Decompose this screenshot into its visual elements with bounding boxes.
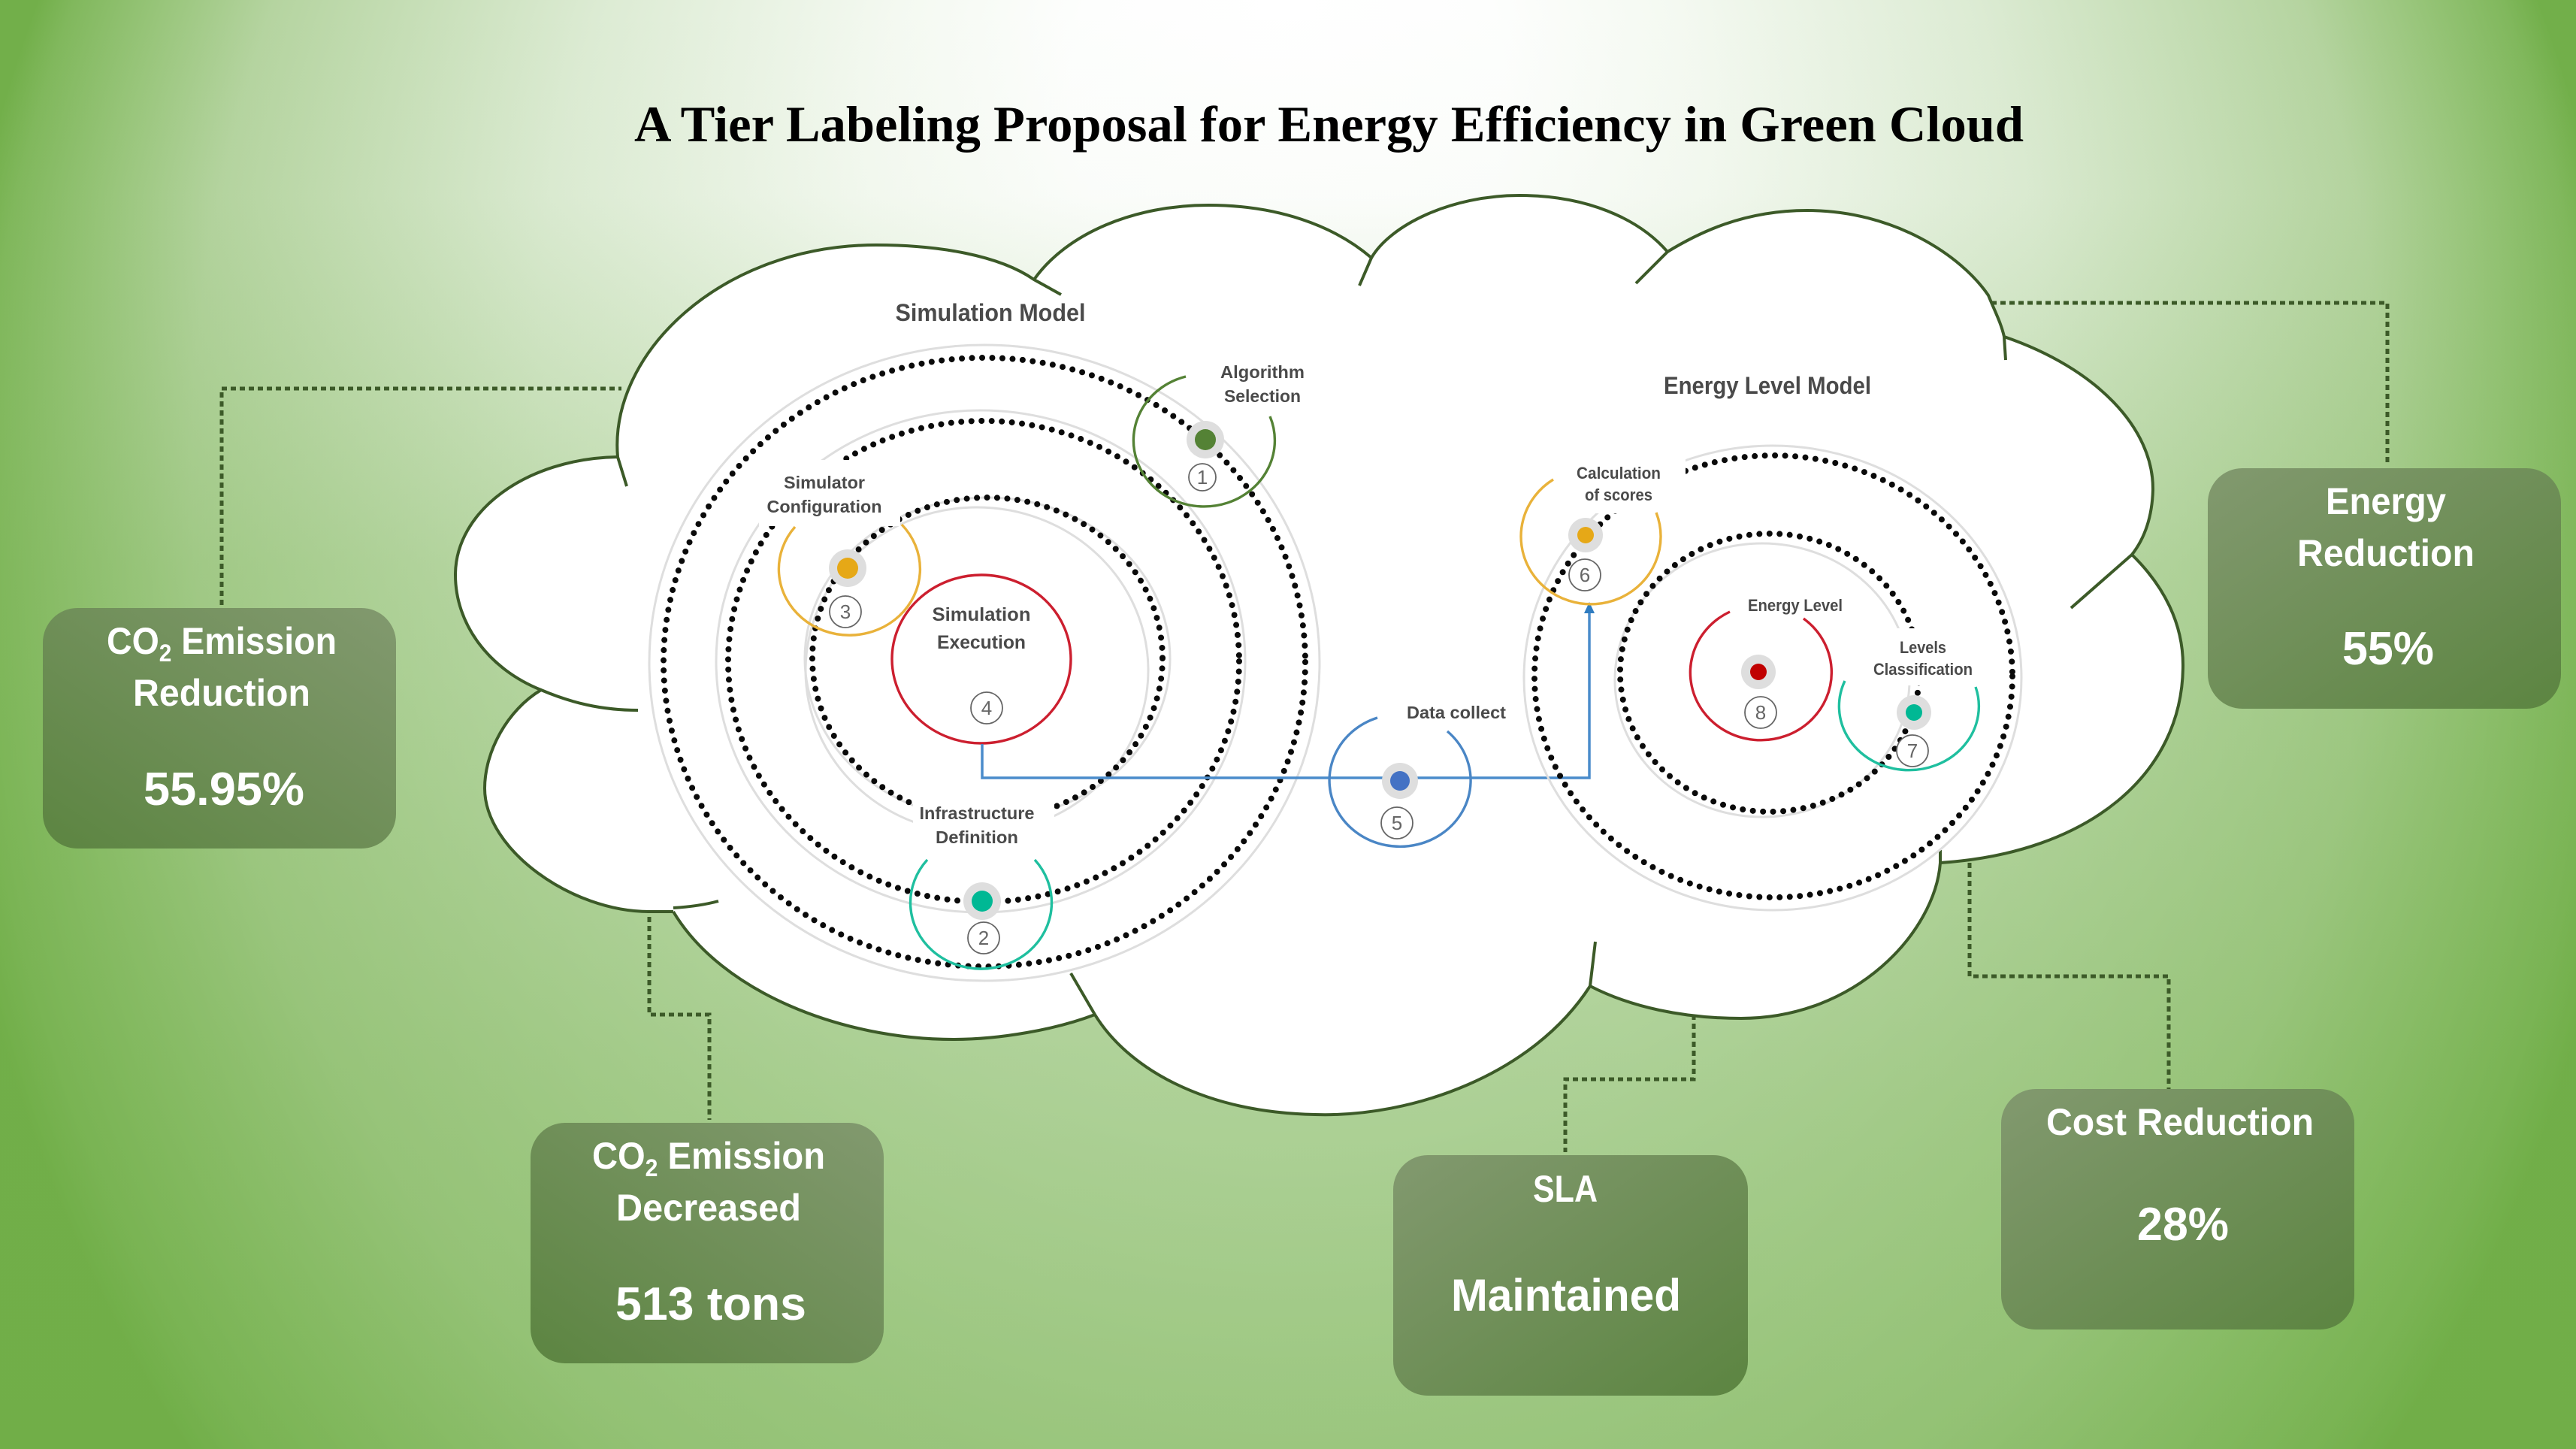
node 7: levels classification: Classification bbox=[1873, 660, 1973, 679]
node 3: simulator configuration: Configuration bbox=[766, 497, 882, 516]
node 8: energy level bbox=[1690, 596, 1843, 740]
panel: simulation model bbox=[649, 299, 1320, 981]
callout: CO2 emission reduction: 2 bbox=[159, 640, 171, 667]
callout: cost reduction: 28% bbox=[2137, 1199, 2229, 1251]
callout: SLA maintained bbox=[1393, 1155, 1748, 1396]
node 6: calculation of scores: Calculation bbox=[1577, 464, 1661, 482]
node 8: energy level: 8 bbox=[1755, 701, 1766, 724]
arrow: flow from simulation execution to calculation of scores bbox=[982, 602, 1595, 778]
node 7: levels classification: Levels bbox=[1900, 638, 1946, 657]
callout: CO2 emission reduction bbox=[43, 608, 396, 849]
heading: energy level model: Energy Level Model bbox=[1664, 372, 1871, 399]
callout: cost reduction: Cost Reduction bbox=[2046, 1101, 2314, 1143]
node 1: algorithm selection bbox=[1133, 362, 1305, 507]
node 1: algorithm selection: 1 bbox=[1197, 466, 1208, 489]
node 5: data collect: 5 bbox=[1392, 812, 1402, 834]
orbit rings bbox=[649, 345, 1320, 981]
orbit rings bbox=[1524, 446, 2021, 910]
node 8: energy level: Energy Level bbox=[1748, 596, 1843, 615]
node 4: simulation execution: 4 bbox=[981, 697, 992, 719]
callout: SLA maintained: Maintained bbox=[1451, 1270, 1681, 1320]
callout: CO2 emission decreased: Decreased bbox=[616, 1187, 801, 1229]
node 2: infrastructure definition: 2 bbox=[978, 927, 989, 949]
callout: CO2 emission decreased: 513 tons bbox=[615, 1278, 806, 1330]
callout: CO2 emission decreased: Emission bbox=[658, 1135, 825, 1177]
node 2: infrastructure definition bbox=[910, 803, 1052, 969]
node 4: simulation execution: Execution bbox=[937, 632, 1026, 653]
node 3: simulator configuration bbox=[766, 473, 920, 635]
connector: energy reduction bbox=[1991, 303, 2387, 466]
node 7: levels classification: 7 bbox=[1907, 740, 1918, 762]
node 6: calculation of scores: 6 bbox=[1580, 564, 1590, 586]
title: A Tier Labeling Proposal for Energy Efficiency in Green Cloud bbox=[634, 95, 2024, 153]
node 5: data collect bbox=[1329, 703, 1506, 846]
node 6: calculation of scores: of scores bbox=[1585, 486, 1652, 504]
node 4: simulation execution bbox=[892, 575, 1071, 743]
callout: energy reduction: 55% bbox=[2342, 623, 2434, 675]
callout: CO2 emission decreased: CO bbox=[592, 1135, 649, 1177]
callout: SLA maintained: SLA bbox=[1533, 1168, 1598, 1210]
heading: simulation model: Simulation Model bbox=[896, 299, 1085, 326]
node 1: algorithm selection: Selection bbox=[1224, 386, 1301, 406]
node 2: infrastructure definition: Definition bbox=[936, 827, 1018, 847]
callout: CO2 emission decreased: 2 bbox=[646, 1154, 658, 1181]
node 6: calculation of scores bbox=[1521, 464, 1661, 604]
callout: cost reduction bbox=[2001, 1089, 2354, 1330]
node 7: levels classification bbox=[1839, 638, 1979, 770]
node 3: simulator configuration: Simulator bbox=[784, 473, 865, 492]
node 1: algorithm selection: Algorithm bbox=[1220, 362, 1305, 382]
panel: energy level model bbox=[1521, 372, 2021, 910]
node 5: data collect: Data collect bbox=[1407, 703, 1506, 722]
callout: CO2 emission reduction: 55.95% bbox=[144, 764, 304, 815]
callout: CO2 emission decreased bbox=[531, 1123, 884, 1363]
node 2: infrastructure definition: Infrastructure bbox=[920, 803, 1034, 823]
connector: SLA bbox=[1565, 1006, 1694, 1152]
callout: CO2 emission reduction: Emission bbox=[171, 620, 337, 662]
node 4: simulation execution: Simulation bbox=[932, 604, 1031, 625]
callout: energy reduction: Reduction bbox=[2297, 532, 2475, 574]
connector: CO2 emission reduction bbox=[222, 389, 621, 605]
connector: cost reduction bbox=[1970, 863, 2169, 1089]
node 3: simulator configuration: 3 bbox=[840, 600, 851, 623]
connector: CO2 emission decreased bbox=[649, 908, 709, 1120]
callout: energy reduction bbox=[2208, 468, 2561, 709]
callout: energy reduction: Energy bbox=[2326, 480, 2446, 522]
cloud bbox=[455, 195, 2183, 1115]
callout: CO2 emission reduction: CO bbox=[107, 620, 163, 662]
callout: CO2 emission reduction: Reduction bbox=[133, 672, 310, 714]
